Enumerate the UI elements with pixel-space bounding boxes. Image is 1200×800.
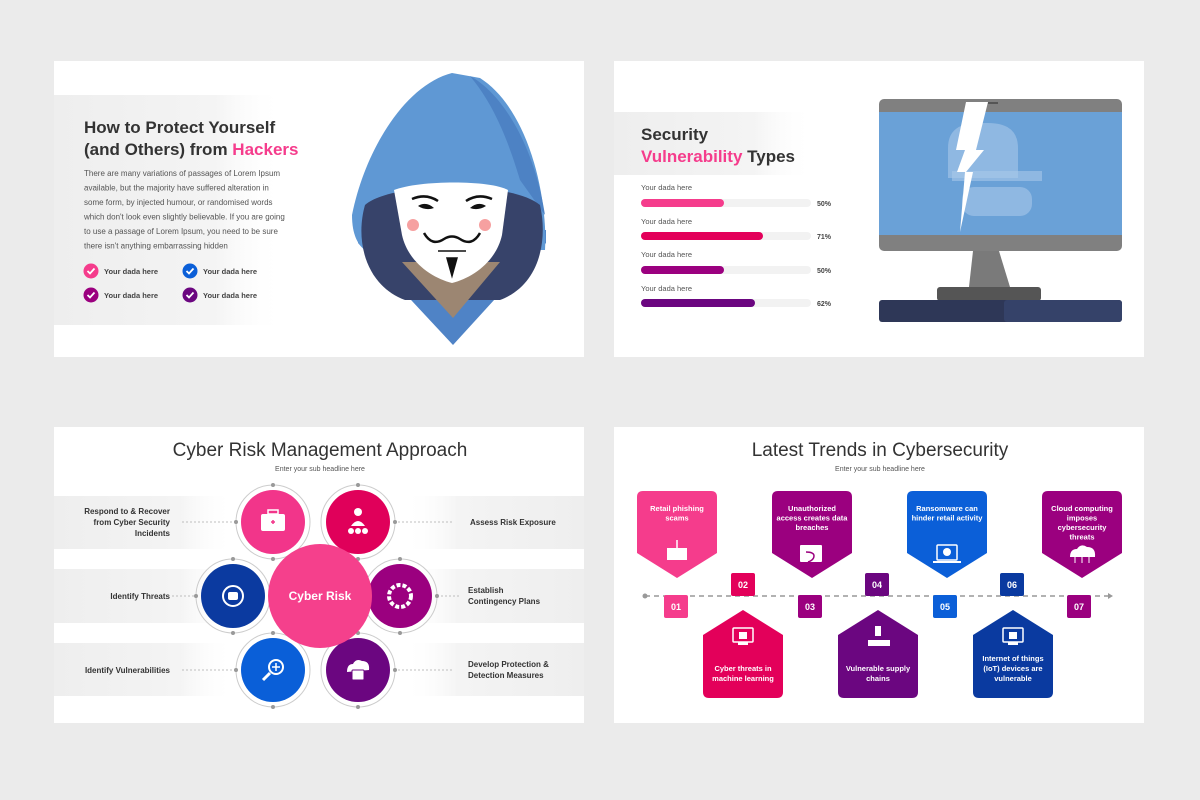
timeline <box>642 593 1113 599</box>
number badges: 07 <box>1074 602 1084 612</box>
title: protect: How to Protect Yourself <box>84 118 275 137</box>
trend icons <box>667 540 1095 646</box>
labels: Respond to & Recover <box>84 507 170 516</box>
trend texts: Retail phishing <box>650 504 704 513</box>
circles <box>194 483 439 709</box>
number badges: 01 <box>671 602 681 612</box>
trend texts: Ransomware can <box>916 504 978 513</box>
trend shapes top <box>637 491 1122 578</box>
subtitle: Enter your sub headline here <box>275 466 365 473</box>
trend texts: vulnerable <box>994 674 1032 683</box>
trend texts: hinder retail activity <box>912 514 983 522</box>
number badges: 02 <box>738 580 748 590</box>
panel: protect from hackers <box>54 61 584 357</box>
text block: lorem: There are many variations of passages of Lorem Ipsum <box>84 169 280 178</box>
number badges: 03 <box>805 602 815 612</box>
trend texts <box>650 504 1113 683</box>
text block: lorem: to use a passage of Lorem Ipsum, you need to be sure <box>84 227 278 236</box>
labels: Assess Risk Exposure <box>470 518 556 527</box>
text block: lorem <box>83 169 285 250</box>
trend texts: (IoT) devices are <box>983 664 1043 673</box>
bar chart <box>641 183 832 308</box>
trend texts: threats <box>1069 532 1095 542</box>
number badges <box>664 573 1091 618</box>
labels: Incidents <box>135 529 171 538</box>
trend texts: breaches <box>796 523 828 532</box>
icons <box>223 508 411 680</box>
trend texts: Cloud computing <box>1051 504 1113 513</box>
labels: Establish <box>468 586 504 595</box>
labels: Detection Measures <box>468 671 544 680</box>
labels: Identify Vulnerabilities <box>85 666 171 675</box>
panel: vulnerability types <box>614 61 1144 357</box>
checklist: Your dada here <box>104 267 158 276</box>
bar chart: Your dada here <box>641 183 692 192</box>
bar chart: Your dada here <box>641 284 692 293</box>
trend texts: scams <box>665 514 689 522</box>
trend texts: Unauthorized <box>788 504 836 513</box>
text block: lorem: which don't look even slightly believable. If you are going <box>83 212 285 222</box>
title: vulnerability <box>641 125 795 166</box>
subtitle: Enter your sub headline here <box>835 466 925 473</box>
bar chart: Your dada here <box>641 250 692 259</box>
trend texts: Internet of things <box>982 654 1044 663</box>
labels: from Cyber Security <box>94 518 171 527</box>
bar chart: 50% <box>817 268 832 275</box>
trend texts: imposes <box>1067 514 1097 522</box>
labels: Contingency Plans <box>468 597 541 606</box>
icon: monitor <box>879 99 1122 322</box>
trend shapes bottom <box>703 610 1053 698</box>
text block: lorem: available, but the majority have suffered alteration in <box>84 184 269 192</box>
bar chart: 71% <box>817 234 832 241</box>
panel: cyber risk management <box>54 427 584 723</box>
panel: latest trends <box>614 427 1144 723</box>
checklist: Your dada here <box>203 267 257 276</box>
labels: Identify Threats <box>110 592 171 601</box>
text block: lorem: some form, by injected humour, or randomised words <box>84 198 273 207</box>
text block: lorem: there isn't anything embarrassing hidden <box>84 242 228 250</box>
number badges: 05 <box>940 602 950 612</box>
bar chart: 62% <box>817 301 832 308</box>
number badges: 06 <box>1007 580 1017 590</box>
trend texts: access creates data <box>777 514 848 522</box>
title: protect <box>84 118 298 159</box>
labels <box>84 507 556 680</box>
title: cyber risk: Cyber Risk Management Approach <box>173 440 467 461</box>
trend texts: Vulnerable supply <box>846 664 911 673</box>
checklist: Your dada here <box>104 291 158 300</box>
trend texts: machine learning <box>712 674 774 683</box>
bar chart: Your dada here <box>641 217 692 226</box>
title: trends: Latest Trends in Cybersecurity <box>752 440 1009 461</box>
labels: Develop Protection & <box>468 660 549 669</box>
title: vulnerability: Vulnerability Types <box>641 147 795 166</box>
title: protect: (and Others) from Hackers <box>84 140 298 159</box>
trend texts: cybersecurity <box>1058 523 1107 532</box>
trend texts: Cyber threats in <box>714 664 772 673</box>
checklist: Your dada here <box>203 291 257 300</box>
icon: hacker <box>352 73 546 345</box>
trend texts: chains <box>866 674 890 683</box>
circles: Cyber Risk <box>289 589 352 603</box>
checklist <box>84 264 257 302</box>
bar chart: 50% <box>817 201 832 208</box>
number badges: 04 <box>872 580 882 590</box>
title: vulnerability: Security <box>641 125 709 144</box>
